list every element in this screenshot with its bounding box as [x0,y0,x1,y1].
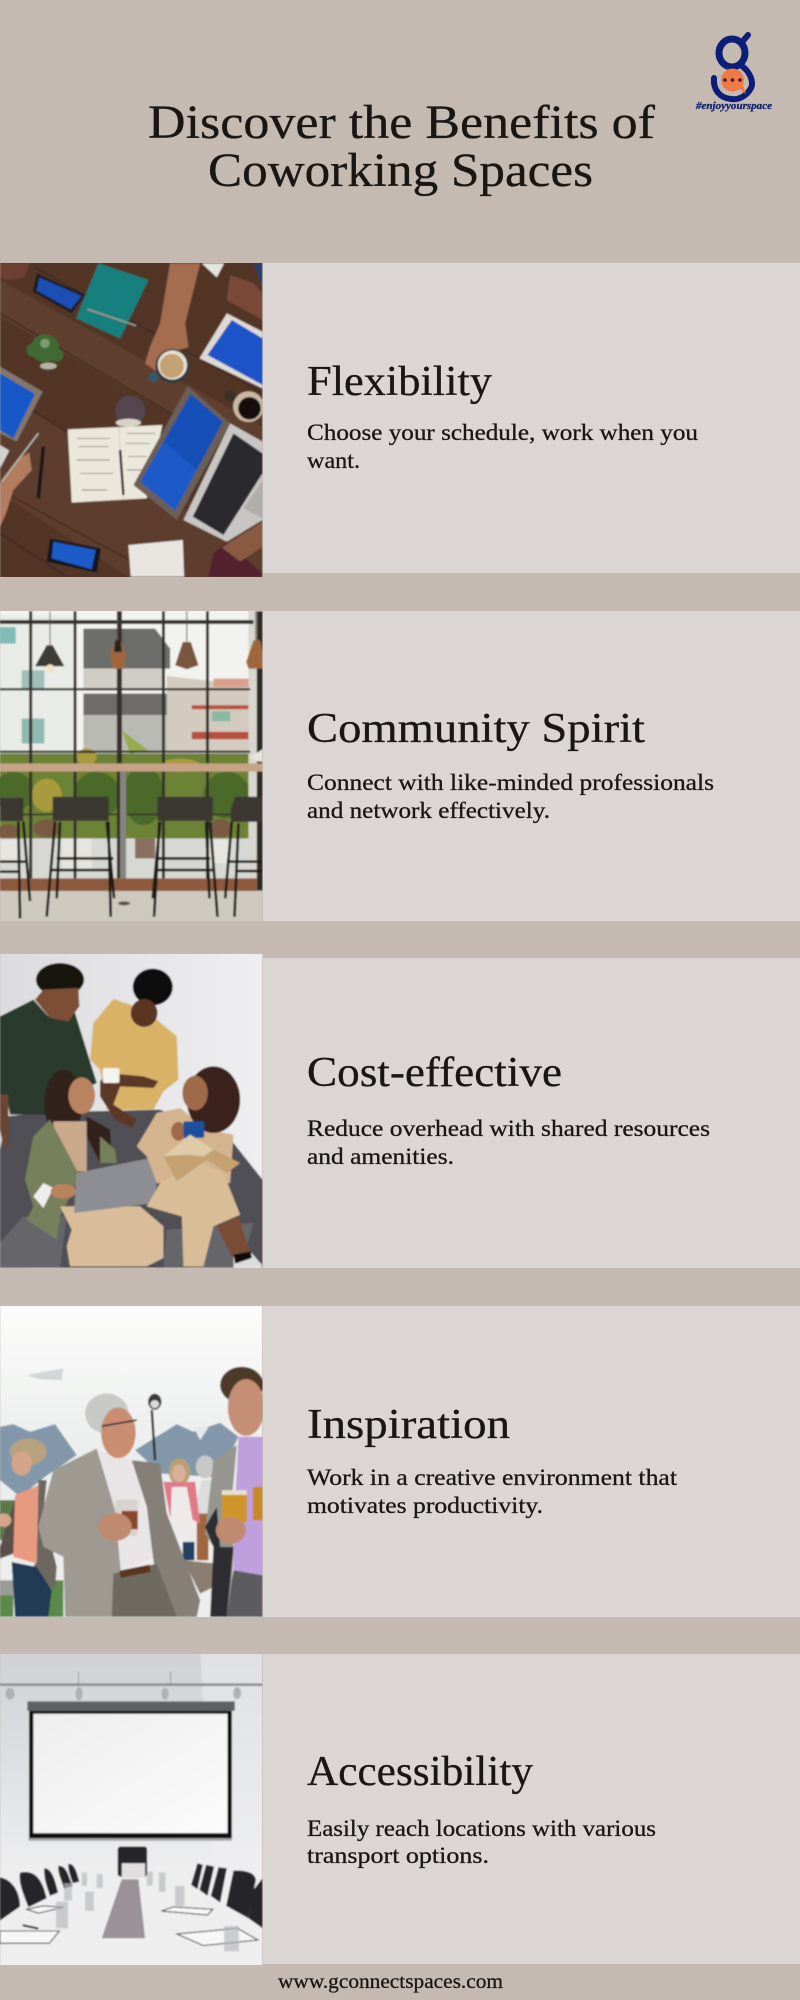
text: Flexibility description: Choose your schedule, work when you [307,420,699,445]
heading: Flexibility: Flexibility [307,359,492,405]
text: Accessibility description: Easily reach locations with various [307,1816,656,1841]
panel: cost-effective [0,950,800,1270]
text: Accessibility description: transport options. [307,1843,489,1868]
title: Coworking Spaces [208,144,593,197]
text: Flexibility description: want. [307,448,360,473]
text: Community Spirit description [307,770,714,823]
heading: Accessibility: Accessibility [307,1749,533,1795]
title: Discover the Benefits of [148,96,655,149]
text: Community Spirit description: and network effectively. [307,798,550,823]
text: Cost-effective description: and amenities. [307,1144,454,1169]
photo: people with drinks on a mountain terrace [0,1306,262,1617]
footer: website: www.gconnectspaces.com [278,1971,503,1993]
text: Accessibility description [307,1816,656,1868]
title [148,96,655,197]
panel: flexibility [0,260,800,580]
panel: community spirit [0,605,800,925]
photo: team at wooden table with laptops [0,263,262,577]
photo: bar stools at cafe window [0,611,262,921]
panel: inspiration [0,1300,800,1620]
text: Cost-effective description [307,1116,710,1169]
heading: Community Spirit: Community Spirit [307,706,645,752]
text: Flexibility description [307,420,699,473]
text: Inspiration description: Work in a creative environment that [307,1465,678,1490]
logo: g with chat bubble and hashtag [695,35,772,112]
text: Inspiration description: motivates productivity. [307,1493,543,1518]
text: Cost-effective description: Reduce overhead with shared resources [307,1116,710,1141]
text: Inspiration description [307,1465,678,1518]
photo: four colleagues on a sofa [0,954,262,1268]
heading: Cost-effective: Cost-effective [307,1050,562,1096]
photo: boardroom with projector screen [0,1654,262,1965]
logo: g with chat bubble and hashtag: #enjoyyourspace [695,101,772,112]
panel: accessibility [0,1650,800,1970]
text: Community Spirit description: Connect with like-minded professionals [307,770,714,795]
heading: Inspiration: Inspiration [307,1402,510,1448]
